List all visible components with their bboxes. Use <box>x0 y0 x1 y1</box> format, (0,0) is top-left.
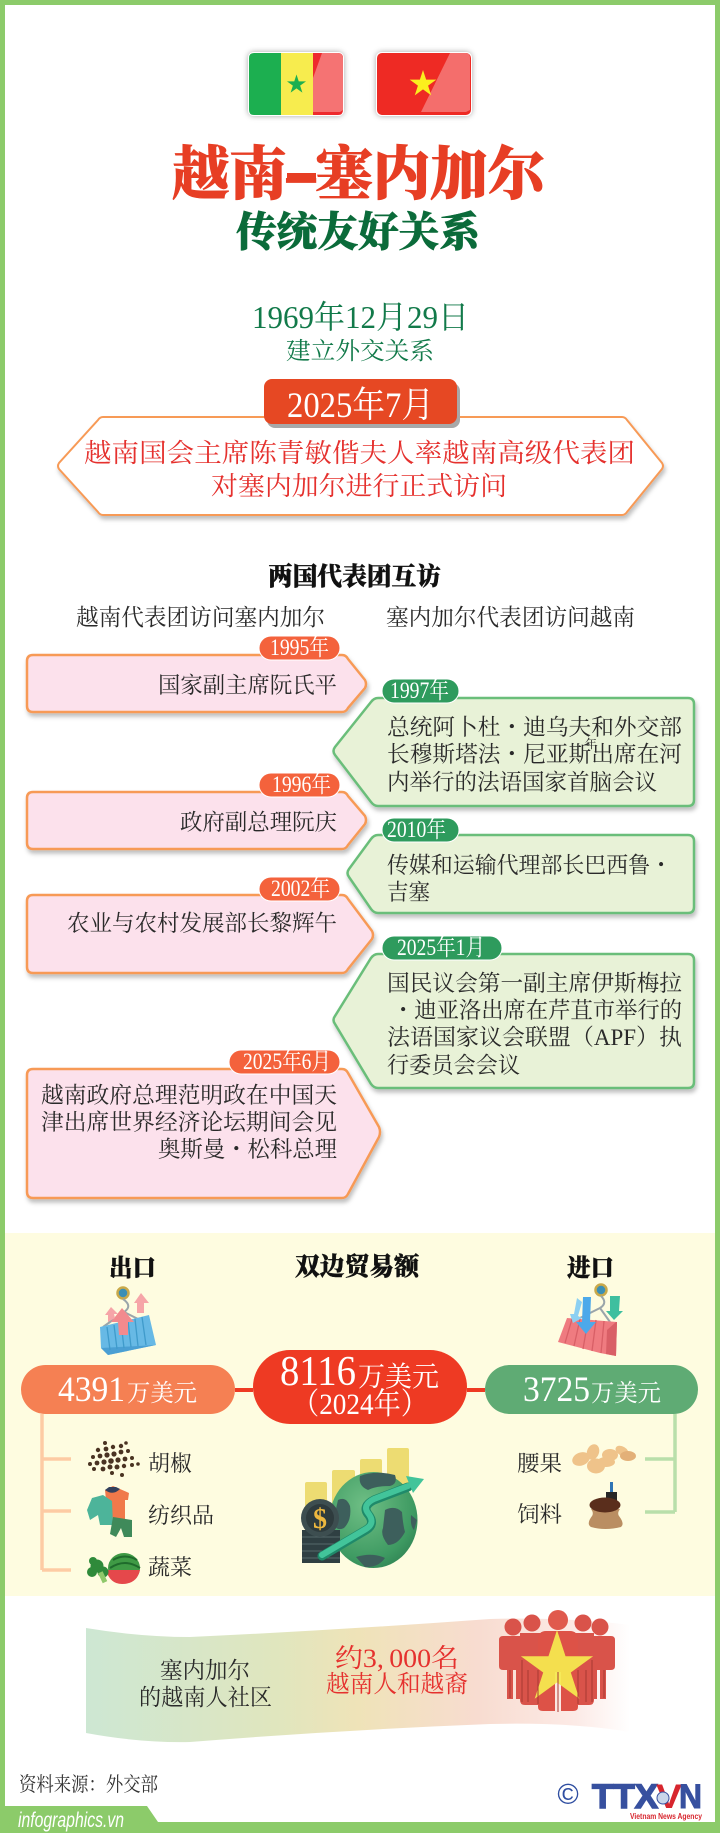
year pill 2010: 2010年 <box>387 817 446 842</box>
source: 资料来源：外交部 <box>19 1773 158 1796</box>
pill: exports value: 万美元 <box>127 1380 197 1407</box>
icon: vegetables <box>87 1553 140 1584</box>
visit text line 1: 越南国会主席陈青敏偕夫人率越南高级代表团 <box>84 439 635 468</box>
N letter: N <box>679 1778 702 1816</box>
pill: total trade value: 万美元 <box>358 1361 439 1393</box>
year pill 2002: 2002年 <box>271 876 330 901</box>
copyright mark: © <box>557 1779 579 1811</box>
column heading: Senegal delegations: 塞内加尔代表团访问越南 <box>386 605 635 630</box>
year pill 1996: 1996年 <box>272 772 331 797</box>
year pill 1995: 1995年 <box>270 635 329 660</box>
heading: trade total: 双边贸易额 <box>295 1253 421 1281</box>
column heading: Vietnam delegations: 越南代表团访问塞内加尔 <box>76 605 325 630</box>
site name: infographics.vn <box>18 1809 124 1832</box>
heading: mutual visits: 两国代表团互访 <box>268 562 441 591</box>
icon: import container <box>558 1284 623 1356</box>
panel: bilateral trade <box>5 1233 715 1596</box>
community label <box>139 1658 272 1710</box>
heading: exports: 出口 <box>109 1255 156 1282</box>
badge: 2025年7月 <box>264 379 460 428</box>
agency name: Vietnam News Agency <box>630 1811 702 1821</box>
diplomatic relations caption: 建立外交关系 <box>286 338 434 365</box>
card text: 总统阿卜杜・迪乌夫和外交部 <box>387 715 682 740</box>
icon: crowd with Vietnamese star <box>499 1610 615 1712</box>
coin stack: $ <box>313 1504 327 1535</box>
community number: 越南人和越裔 <box>326 1671 468 1698</box>
card text: 越南政府总理范明政在中国天 <box>41 1083 337 1108</box>
community number: 约3, 000名 <box>335 1644 459 1673</box>
footer band <box>0 1806 720 1833</box>
label: textiles: 纺织品 <box>148 1503 214 1528</box>
year pill 2025-01: 2025年1月 <box>397 935 485 960</box>
card: 1997 <box>334 678 694 806</box>
pill: imports value <box>485 1365 698 1414</box>
card text: ・迪亚洛出席在芹苴市举行的 <box>392 998 682 1023</box>
card text: 法语国家议会联盟（APF）执 <box>387 1025 682 1050</box>
card text: 农业与农村发展部长黎辉午 <box>67 911 337 936</box>
pill: total trade value <box>253 1349 467 1424</box>
card text: 内举行的法语国家首脑会议 <box>387 770 657 795</box>
card text: 长穆斯塔法・尼亚斯出席在河 <box>387 742 682 767</box>
visit text line 2: 对塞内加尔进行正式访问 <box>211 472 507 501</box>
card: 2010 <box>348 817 694 913</box>
pill: imports value: 3725 <box>523 1369 590 1409</box>
badge: 2025年7月: 2025年7月 <box>287 385 434 425</box>
stray character: 年 <box>585 736 597 751</box>
import tree lines <box>645 1414 675 1512</box>
icon: Senegal flag <box>248 52 344 116</box>
connector lines <box>235 1388 485 1392</box>
banner: Vietnamese community in Senegal <box>86 1610 630 1742</box>
label: vegetables: 蔬菜 <box>148 1555 192 1580</box>
pill: total trade value: （2024年） <box>292 1388 428 1421</box>
heading: imports: 进口 <box>567 1255 614 1282</box>
card text: 津出席世界经济论坛期间会见 <box>41 1110 337 1135</box>
icon: pepper <box>88 1441 140 1477</box>
chart bars <box>305 1448 409 1532</box>
card text: 行委员会会议 <box>387 1053 520 1078</box>
card text: 国民议会第一副主席伊斯梅拉 <box>387 971 682 996</box>
year pill 1997: 1997年 <box>390 678 449 703</box>
icon: Vietnam flag <box>376 52 472 116</box>
pill: imports value: 万美元 <box>591 1380 661 1407</box>
year pill 2025-06: 2025年6月 <box>243 1049 331 1074</box>
globe mark <box>657 1792 669 1804</box>
icon: export container <box>100 1288 156 1355</box>
subtitle: 传统友好关系 <box>236 209 482 255</box>
community number <box>326 1644 468 1698</box>
label: cashew: 腰果 <box>517 1451 562 1476</box>
globe <box>330 1472 418 1568</box>
card text: 奥斯曼・松科总理 <box>158 1137 337 1162</box>
growth arrow <box>322 1476 424 1556</box>
callout: official visit <box>58 379 663 515</box>
label: pepper: 胡椒 <box>148 1451 192 1476</box>
card text: 国家副主席阮氏平 <box>158 673 337 698</box>
card: 2025-01 <box>334 935 694 1088</box>
label: feed: 饲料 <box>517 1502 562 1527</box>
card: 2002 <box>27 876 373 973</box>
V accent: V <box>656 1778 682 1816</box>
icon: globe and chart <box>301 1448 424 1568</box>
logo: TTXVN <box>557 1778 702 1821</box>
pill: total trade value: 8116 <box>280 1349 356 1395</box>
pill: exports value <box>21 1365 235 1414</box>
wordmark: TTX <box>592 1778 658 1816</box>
community label: 的越南人社区 <box>139 1685 272 1710</box>
title: 越南–塞内加尔 <box>172 142 550 207</box>
icon: textiles <box>87 1486 132 1537</box>
icon: feed sack <box>589 1482 623 1529</box>
community label: 塞内加尔 <box>160 1658 250 1683</box>
card text: 传媒和运输代理部长巴西鲁・ <box>387 853 672 878</box>
pill: exports value: 4391 <box>58 1369 125 1409</box>
card text: 政府副总理阮庆 <box>180 810 337 835</box>
card text: 吉塞 <box>387 880 430 905</box>
card: 1995 <box>27 635 366 712</box>
export tree lines <box>42 1414 71 1570</box>
date of diplomatic relations: 1969年12月29日 <box>252 299 469 335</box>
card: 2025-06 <box>27 1049 380 1198</box>
icon: cashew <box>570 1442 636 1474</box>
card: 1996 <box>27 772 366 849</box>
